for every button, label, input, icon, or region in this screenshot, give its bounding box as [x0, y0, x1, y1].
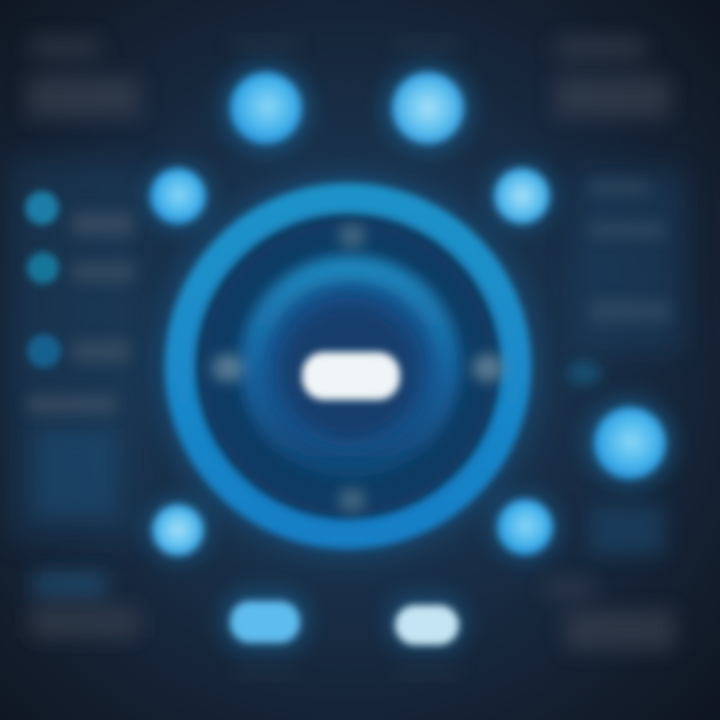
icon: right large circle	[584, 397, 676, 489]
panel: top centre labels	[232, 38, 460, 50]
panel: bottom left text block	[30, 572, 140, 638]
panel: top right text block	[555, 38, 670, 118]
panel: bottom right text block	[545, 580, 675, 650]
dark inner field	[202, 222, 494, 514]
panel: left list	[10, 160, 140, 540]
centre label	[302, 352, 400, 400]
icon: bottom right pill	[385, 592, 469, 654]
ring marker right	[472, 354, 504, 382]
left panel backdrop	[10, 160, 140, 540]
middle ring	[252, 268, 448, 464]
icon: lower left circle	[144, 496, 212, 564]
right panel backdrop	[575, 170, 685, 350]
icon: top right large circle	[382, 62, 474, 154]
left list text lines	[28, 212, 134, 415]
icon: right small dot	[567, 361, 601, 385]
chart: central concentric ring diagram	[158, 176, 538, 556]
left lower block	[35, 430, 115, 515]
right list text lines	[590, 180, 670, 322]
icon: upper right circle	[486, 160, 558, 232]
panel: bottom centre labels	[235, 668, 460, 678]
right lower block	[590, 505, 665, 555]
icon: left dot 2	[27, 252, 59, 284]
icon: lower right circle	[489, 491, 561, 563]
panel: right list	[567, 170, 685, 555]
ring marker bottom	[338, 488, 366, 512]
icon: left dot 1	[25, 191, 59, 225]
inner core	[282, 304, 418, 440]
glow	[158, 176, 538, 556]
ring marker left	[212, 354, 244, 382]
outer ring	[180, 198, 516, 534]
icon: bottom left pill	[220, 588, 310, 654]
icon: left dot 3	[27, 334, 61, 368]
ring marker top	[338, 224, 366, 248]
icon: upper left circle	[142, 160, 214, 232]
panel: top left text block	[28, 38, 140, 118]
icon: top left large circle	[220, 62, 312, 154]
